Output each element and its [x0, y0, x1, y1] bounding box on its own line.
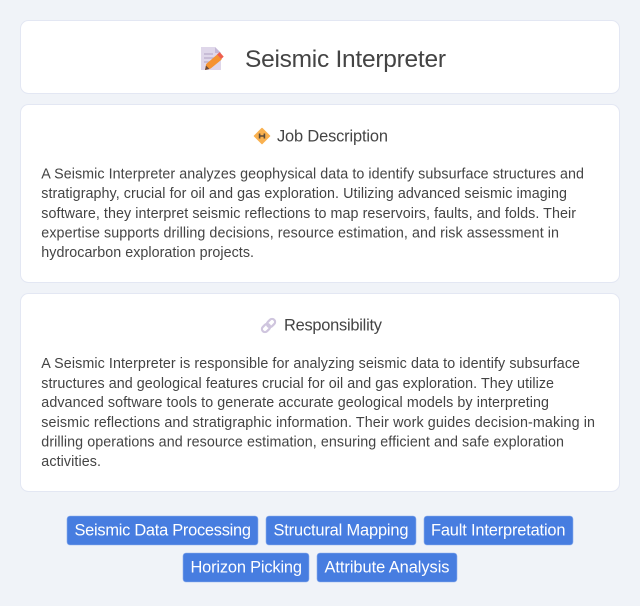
tag: seismic data processing — [67, 516, 258, 545]
text block: job description: expertise supports drilling decisions, resource estimation, and risk assessment in — [41, 226, 559, 242]
tag: fault interpretation: Fault Interpretation — [431, 522, 566, 540]
panel: responsibility — [20, 294, 620, 492]
tag: attribute analysis — [317, 553, 457, 582]
tag: horizon picking: Horizon Picking — [190, 558, 302, 576]
tags: skills — [67, 516, 573, 582]
text block: job description: A Seismic Interpreter analyzes geophysical data to identify subsurface structures and — [41, 166, 584, 182]
panel: job description — [20, 104, 620, 282]
text block: responsibility: seismic reflections and stratigraphic information. Their work guides decision-making in — [41, 415, 595, 431]
text block: job description: software, they interpret seismic reflections to map reservoirs, faults, and folds. Their — [41, 206, 576, 222]
icon: document with pencil — [201, 47, 224, 70]
text block: job description — [41, 166, 584, 261]
tag: attribute analysis: Attribute Analysis — [324, 558, 450, 576]
icon: road sign diamond — [254, 128, 270, 144]
heading: responsibility: Responsibility — [284, 316, 383, 334]
tag: horizon picking — [183, 553, 309, 582]
tag: structural mapping: Structural Mapping — [274, 522, 408, 540]
text block: responsibility: drilling operations and resource estimation, ensuring efficient and safe exploration — [41, 434, 564, 450]
text block: responsibility: A Seismic Interpreter is responsible for analyzing seismic data to identify subsurface — [41, 356, 580, 372]
heading: job description: Job Description — [277, 128, 388, 146]
icon: chain link — [261, 318, 276, 333]
text block: responsibility — [41, 356, 595, 470]
text block: responsibility: activities. — [41, 454, 101, 470]
text block: responsibility: structures and geological features crucial for oil and gas exploration. They utilize — [41, 376, 554, 392]
title: Seismic Interpreter — [245, 46, 446, 73]
tag: fault interpretation — [424, 516, 573, 545]
tag: structural mapping — [266, 516, 416, 545]
panel: title card — [20, 20, 620, 94]
tag: seismic data processing: Seismic Data Processing — [74, 522, 251, 540]
text block: job description: hydrocarbon exploration projects. — [41, 245, 254, 261]
text block: job description: stratigraphy, crucial for oil and gas exploration. Utilizing advanced seismic imaging — [41, 186, 567, 202]
text block: responsibility: advanced software tools to generate accurate geological models by interpreting — [41, 395, 549, 411]
